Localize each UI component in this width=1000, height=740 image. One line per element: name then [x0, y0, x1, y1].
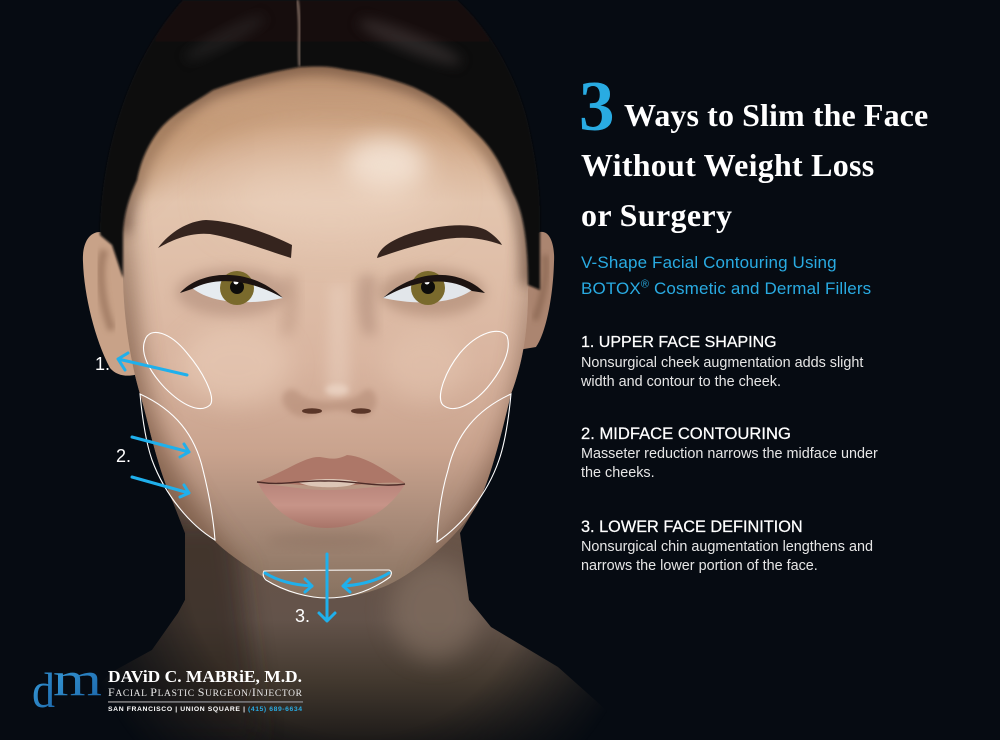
hair — [100, 0, 540, 290]
illustration: portrait with treatment zones — [34, 0, 591, 740]
nose wings — [282, 389, 376, 417]
right ear shade — [535, 255, 546, 320]
title line 1: Ways to Slim the Face — [624, 97, 928, 133]
arrow 2 upper — [132, 437, 189, 457]
item 3: lower face definition — [581, 518, 873, 574]
item 3: lower face definition: Nonsurgical chin augmentation lengthens and — [581, 539, 873, 555]
item 3: lower face definition: narrows the lower portion of the face. — [581, 558, 818, 574]
left lid — [180, 275, 283, 298]
cheek right glow — [399, 351, 452, 391]
big numeral 3: 3 — [579, 68, 614, 146]
logo: DAViD C. MABRiE, M.D. — [108, 667, 302, 686]
left pupil — [230, 280, 244, 294]
eyes — [176, 268, 485, 316]
right ear — [518, 232, 554, 350]
cheek left glow — [186, 331, 286, 406]
label 1: 1. — [95, 354, 110, 374]
neck left shadow — [135, 510, 258, 701]
right eye socket — [379, 268, 485, 316]
nose tip — [325, 384, 349, 396]
subtitle: V-Shape Facial Contouring Using — [581, 253, 837, 272]
right lid — [383, 275, 485, 298]
item 2: midface contouring: 2. MIDFACE CONTOURING — [581, 424, 791, 443]
item 2: midface contouring: the cheeks. — [581, 465, 655, 481]
forehead highlight — [345, 139, 425, 191]
right pupil — [421, 280, 435, 294]
left eye white — [192, 276, 283, 302]
brows — [158, 220, 502, 258]
hair sheen left — [182, 10, 268, 66]
nose bridge highlight — [326, 289, 350, 385]
label 3: 3. — [295, 606, 310, 626]
title line 2: Without Weight Loss — [581, 147, 874, 183]
hair part — [297, 0, 300, 66]
right iris — [411, 271, 445, 305]
left ear shade — [101, 250, 112, 330]
right eye white — [383, 277, 472, 302]
left glint — [234, 280, 238, 284]
chin shadow — [306, 537, 342, 542]
right side shading — [420, 244, 528, 565]
logo: (415) 689-6634 — [248, 706, 302, 713]
arrow 3 right — [343, 573, 389, 592]
arrow 2 lower — [132, 477, 189, 497]
zone 2 left: masseter — [140, 394, 215, 540]
nose side shadow left — [282, 275, 298, 335]
neck right light — [390, 560, 480, 660]
logo: d — [32, 662, 55, 718]
item 3: lower face definition: 3. LOWER FACE DEFINITION — [581, 518, 803, 536]
left eye socket — [176, 268, 288, 316]
zone 1 left: cheek oval — [144, 332, 212, 409]
arrow 3 down — [319, 554, 335, 621]
item 1: upper face shaping: Nonsurgical cheek augmentation adds slight — [581, 355, 863, 371]
zone 2 right: masseter — [437, 394, 511, 542]
item 2: midface contouring — [581, 424, 878, 481]
label 2: 2. — [116, 446, 131, 466]
hairline shadow — [123, 66, 528, 285]
left iris — [220, 271, 254, 305]
subtitle — [581, 253, 871, 298]
logo: SAN FRANCISCO | UNION SQUARE | — [108, 706, 245, 713]
title line 3: or Surgery — [581, 197, 732, 233]
face — [118, 40, 535, 598]
logo — [32, 653, 303, 718]
item 1: upper face shaping — [581, 334, 864, 390]
treatment zones — [140, 331, 511, 598]
left ear — [83, 232, 142, 376]
nose side shadow right — [358, 275, 376, 335]
zone 3: chin — [263, 570, 391, 598]
subtitle: BOTOX® Cosmetic and Dermal Fillers — [581, 278, 871, 298]
nose — [282, 384, 376, 417]
zone 1 right: cheek oval — [440, 331, 508, 409]
forehead glow — [240, 147, 395, 223]
logo: m — [53, 653, 102, 706]
forehead tan — [140, 112, 483, 200]
hair sheen right — [355, 12, 465, 72]
nostril right — [351, 408, 371, 414]
item 1: upper face shaping: width and contour to the cheek. — [581, 374, 781, 390]
logo: FACIAL PLASTIC SURGEON/INJECTOR — [108, 685, 303, 699]
item 2: midface contouring: Masseter reduction narrows the midface under — [581, 446, 878, 462]
arrow 3 left — [265, 573, 312, 592]
arrow 1 — [118, 353, 187, 375]
neck and shoulders — [114, 500, 591, 740]
lips — [257, 455, 405, 528]
item 1: upper face shaping: 1. UPPER FACE SHAPING — [581, 334, 777, 351]
arrows — [118, 353, 389, 621]
left side shading — [122, 198, 248, 566]
right glint — [424, 280, 430, 284]
nostril left — [302, 408, 322, 414]
